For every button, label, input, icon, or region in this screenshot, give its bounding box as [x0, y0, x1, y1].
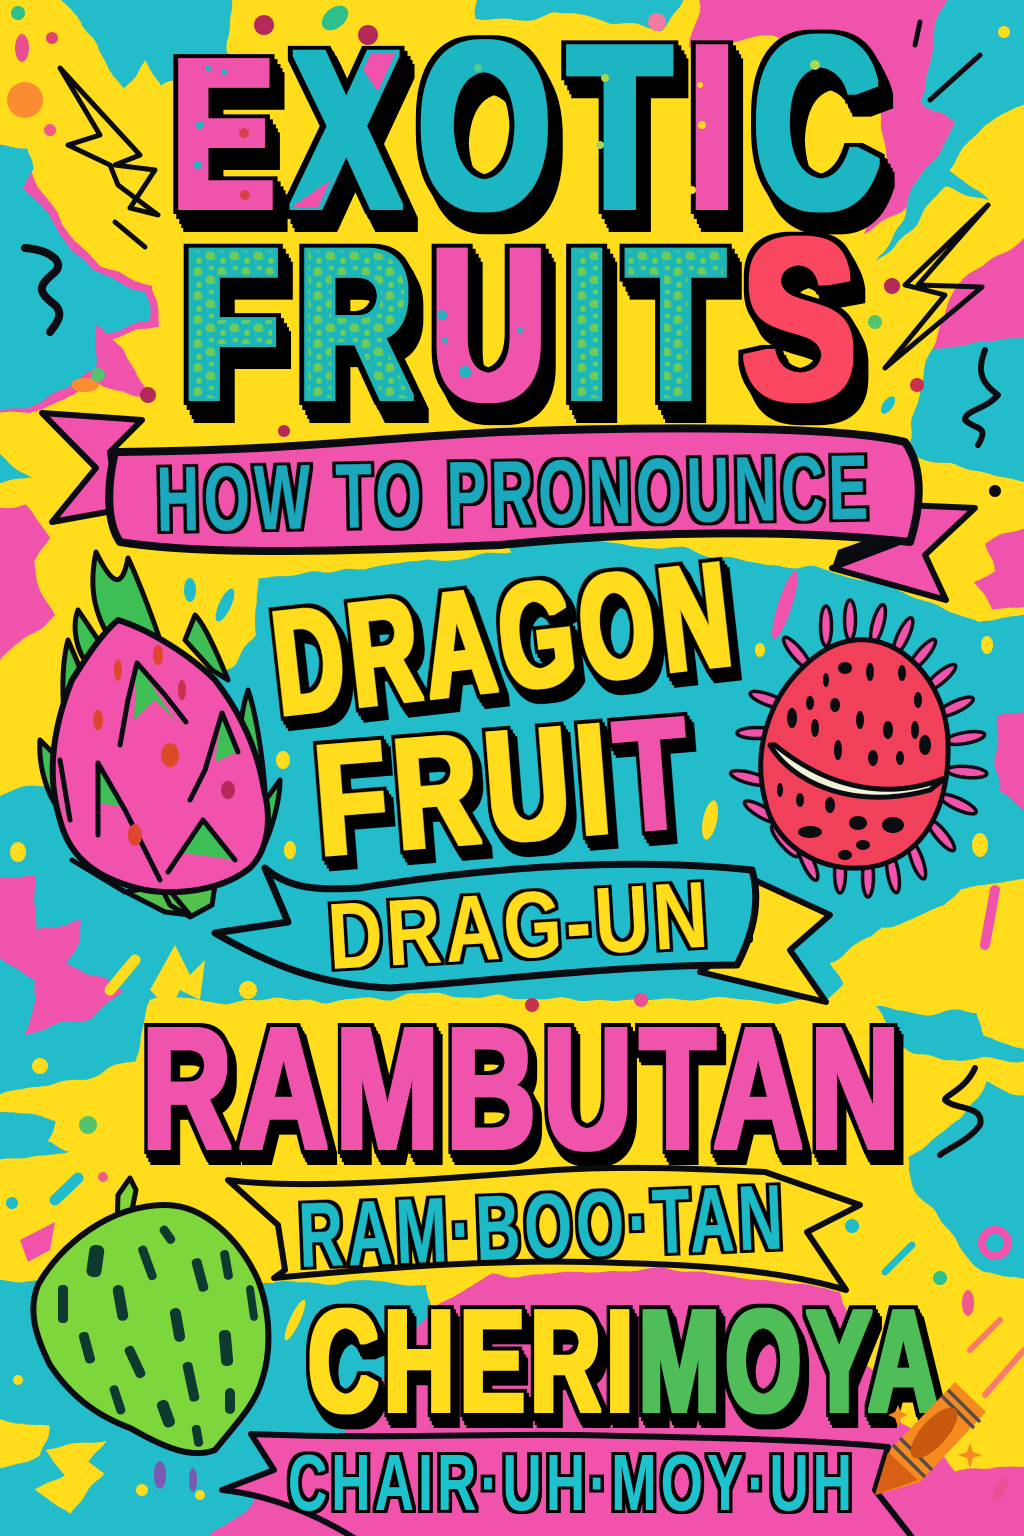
- cherimoya stem: [117, 1178, 136, 1230]
- cherimoya body: [33, 1205, 268, 1453]
- banner: chair-uh-moy-uh: [222, 1434, 918, 1536]
- crayon tip: [875, 1452, 918, 1495]
- title texture: [194, 250, 723, 398]
- banner body: [109, 428, 919, 551]
- banner: how to pronounce: [42, 413, 975, 600]
- rambutan body: [761, 640, 948, 868]
- title speckles on U: [437, 310, 523, 378]
- rambutan band: [770, 745, 945, 797]
- banner fold: [832, 535, 905, 568]
- dragon fruit bottom leaves: [72, 860, 215, 917]
- rambutan spines: [729, 600, 987, 897]
- cherimoya seeds: [58, 1224, 258, 1448]
- dragon fruit top spikes: [40, 552, 280, 850]
- title speckles: [194, 60, 820, 200]
- banner body: [222, 1434, 918, 1536]
- yellow tail: [700, 878, 830, 1002]
- dragon fruit scales: [50, 663, 235, 860]
- doodle: left lightning bolt: [60, 68, 158, 215]
- fruit illustration: dragon fruit: [40, 552, 280, 917]
- banner text: RAM·BOO·TAN: [297, 1166, 788, 1287]
- sparkles: [888, 1405, 982, 1468]
- banner body: [228, 1168, 860, 1290]
- doodle: right squiggle: [965, 350, 998, 445]
- heading: dragon: DRAGON: [265, 531, 745, 747]
- teal banner body: [215, 864, 756, 988]
- doodle: right lightning bolt: [885, 205, 988, 368]
- doodle: rambutan squiggle: [940, 1068, 981, 1155]
- fruit illustration: rambutan: [729, 600, 987, 897]
- heading: fruit: FRUIT: [309, 685, 701, 889]
- dragon fruit body: [53, 620, 268, 892]
- fruit illustration: cherimoya: [33, 1178, 268, 1453]
- banner tail left: [42, 413, 142, 522]
- crayon label: [903, 1401, 965, 1465]
- crayon body: [875, 1382, 986, 1495]
- doodle: top right marks: [115, 22, 980, 247]
- dragon fruit seeds: [114, 659, 122, 681]
- banner: ram-boo-tan: [228, 1166, 860, 1290]
- doodle: left squiggle: [25, 248, 59, 332]
- icon: crayon: [875, 1382, 986, 1495]
- pronunciation: drag-un: DRAG-UN: [325, 861, 715, 989]
- rambutan seeds: [777, 662, 931, 860]
- title texture: X pink edges: [294, 52, 396, 207]
- crayon stripes: [893, 1390, 980, 1477]
- title: FRUITS: FRUITS: [182, 193, 874, 447]
- banner tail right: [832, 505, 975, 600]
- banner: drag-un: [215, 864, 830, 1002]
